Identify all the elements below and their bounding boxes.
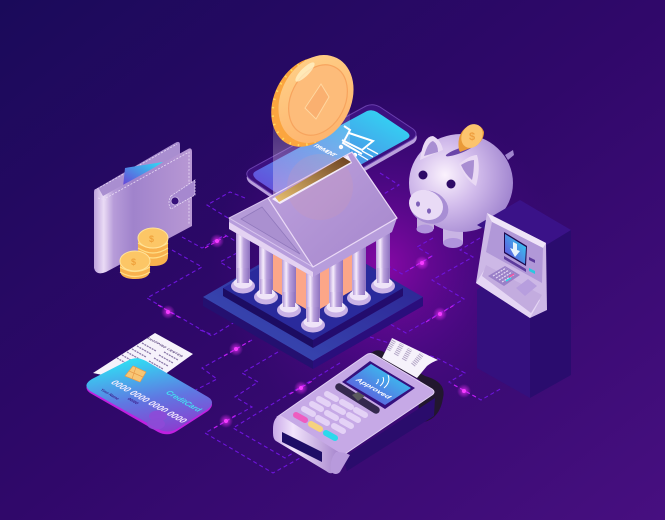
phone — [247, 105, 417, 210]
card logo — [147, 410, 167, 430]
pos keypad — [296, 394, 365, 438]
circuit nodes — [161, 234, 471, 428]
pig snout — [404, 184, 454, 230]
pos screen — [342, 361, 415, 409]
card holder name: Your Name — [99, 388, 121, 401]
pos screen: Approved — [353, 378, 392, 400]
ATM screen — [504, 232, 527, 266]
pos strap — [370, 350, 444, 422]
card number: 0000 0000 0000 0000 — [107, 379, 190, 425]
pos receipt — [382, 338, 438, 378]
piggy bank — [404, 120, 514, 248]
coin stacks — [120, 228, 168, 279]
wallet — [94, 142, 195, 279]
bank roof — [229, 152, 397, 277]
pos top — [277, 354, 434, 458]
POS terminal — [273, 338, 444, 474]
pos slot — [282, 432, 322, 462]
phone label: PAYMENT — [311, 144, 338, 158]
ATM head — [476, 213, 547, 318]
ATM keypad — [488, 266, 520, 286]
receipt: SHOPPING CENTER — [145, 337, 184, 358]
light beam — [273, 100, 350, 201]
coin — [256, 42, 368, 160]
circuit lines — [147, 173, 502, 473]
ATM — [476, 200, 571, 398]
receipt and credit card — [86, 333, 212, 434]
coin stacks: $ — [131, 257, 136, 267]
wallet strap — [169, 180, 195, 209]
icon: shopping cart — [340, 126, 378, 160]
pig legs — [416, 212, 463, 248]
bank columns — [231, 230, 395, 332]
pos front — [273, 415, 340, 473]
coin shadow — [287, 154, 353, 220]
pos navigation keys — [339, 387, 376, 410]
coin stacks: $ — [149, 234, 154, 244]
card brand: CreditCard — [163, 389, 205, 413]
card date: 00/00 — [126, 397, 140, 405]
pig coin: $ — [469, 131, 475, 143]
pig ears — [420, 136, 479, 186]
coin slot — [272, 155, 352, 204]
pig eyes — [418, 170, 456, 188]
bank interior wall — [273, 250, 353, 313]
pos dark side — [343, 398, 435, 471]
bank platform — [203, 233, 423, 369]
card chip — [125, 366, 146, 382]
wallet card — [123, 162, 163, 187]
